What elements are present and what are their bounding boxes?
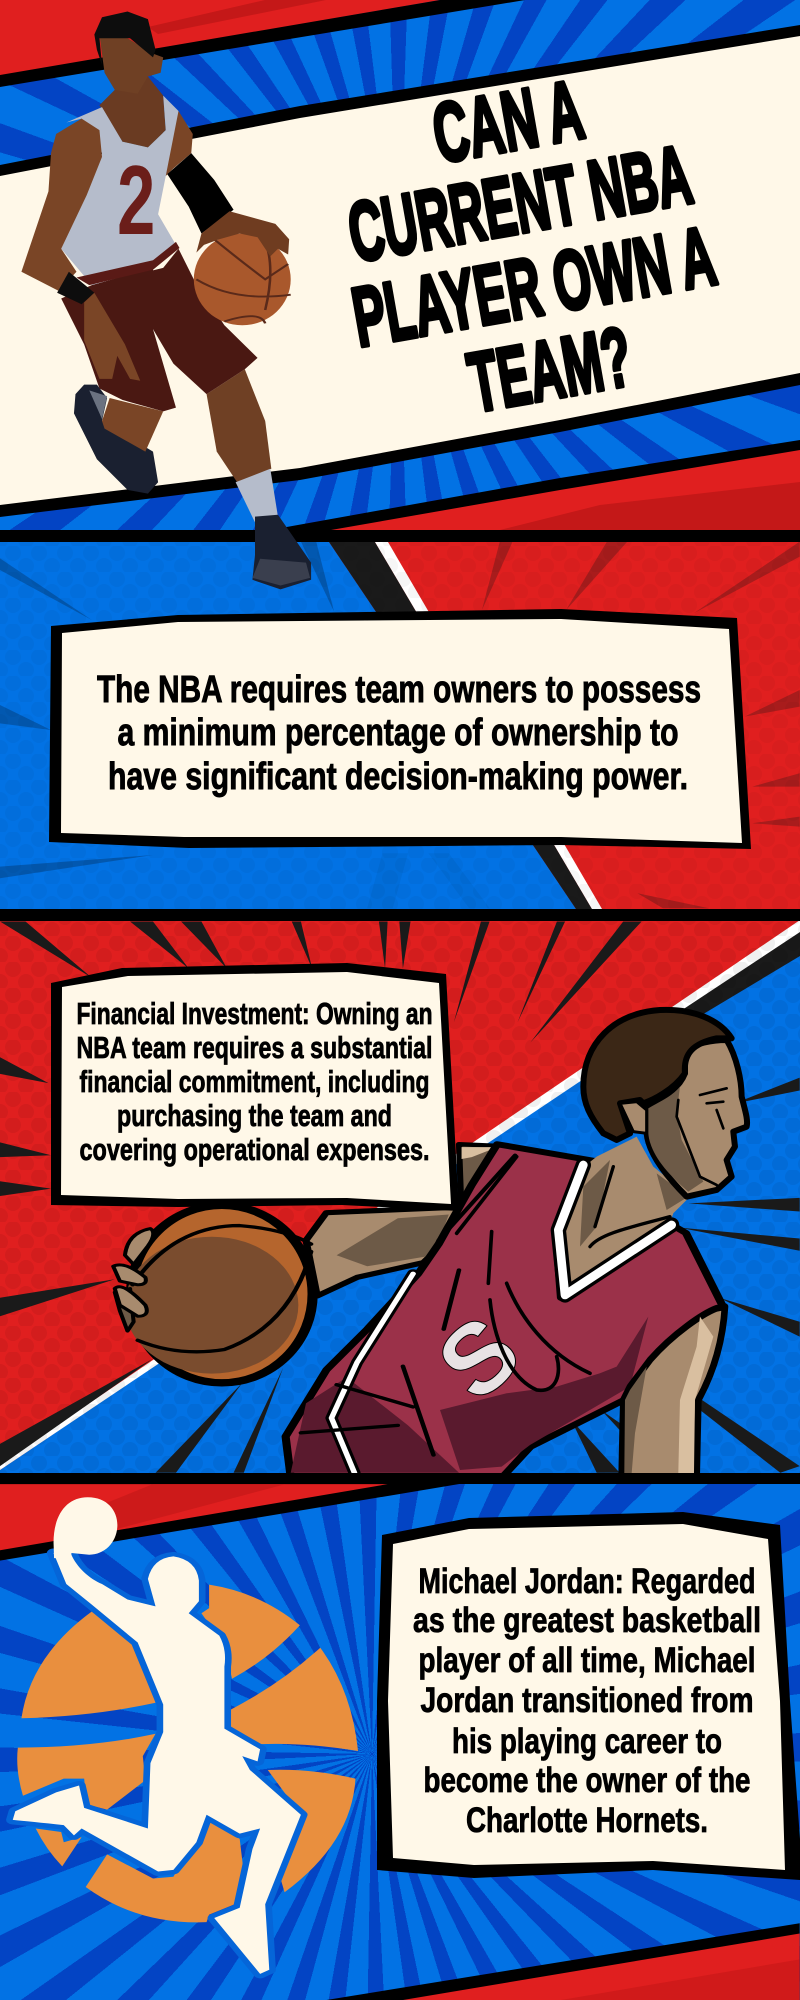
- icon: orange basketball and leaping silhouette: [13, 1497, 358, 1974]
- text block: financial investment: purchasing the team and: [117, 1098, 392, 1133]
- icon: player one shorts: [61, 249, 258, 411]
- icon: player one number: 2: [117, 146, 155, 256]
- icon: player one right leg and shoe: [207, 369, 311, 589]
- section 3: red and blue diagonal background: [0, 920, 800, 1473]
- section 4: lower panel corners: [0, 1481, 800, 2000]
- icon: player two jersey: [286, 1144, 723, 1477]
- icon: orange basketball segments: [17, 1585, 358, 1922]
- icon: player one torso and arm: [21, 77, 193, 381]
- background: bottom blue sunburst: [0, 1484, 800, 2000]
- section 2: blue and red split background: [0, 542, 800, 909]
- icon: basketball: [113, 1205, 313, 1383]
- text block: michael jordan: Charlotte Hornets.: [466, 1801, 708, 1840]
- icon: jumping player silhouette: [13, 1553, 301, 1974]
- icon: player two number: S: [417, 1294, 541, 1422]
- text block: financial investment: NBA team requires a substantial: [76, 1030, 432, 1065]
- text block: financial investment: [76, 996, 432, 1167]
- title: CAN A: [426, 62, 590, 181]
- icon: player one left leg and shoe: [74, 385, 163, 494]
- icon: player two rear arm: [306, 1144, 502, 1296]
- text block: financial investment: covering operational expenses.: [80, 1132, 430, 1167]
- icon: player two neck and collar: [558, 1137, 690, 1295]
- section 1: header banner: [0, 0, 800, 530]
- icon: silhouette ball: [54, 1497, 117, 1558]
- panel: financial investment callout: [51, 963, 459, 1211]
- background: top blue sunburst: [0, 0, 800, 530]
- text block: michael jordan: his playing career to: [452, 1722, 722, 1761]
- text block: financial investment: Financial Investment: Owning an: [76, 996, 432, 1031]
- icon: player one sleeve and ball: [167, 153, 291, 325]
- icon: player one dribbling: [21, 11, 311, 589]
- text block: financial investment: financial commitment, including: [80, 1064, 430, 1099]
- top black stripe: [0, 0, 525, 87]
- cream title band: [0, 25, 800, 517]
- horizontal black section bars: [0, 530, 800, 1484]
- top red corner: [0, 1481, 479, 1561]
- panel: ownership rule callout: [49, 609, 751, 849]
- bottom red corner: [326, 1923, 800, 2000]
- player two dribbling a basketball: [113, 1010, 747, 1477]
- icon: player one head: [94, 11, 163, 94]
- speed lines: [0, 921, 800, 1473]
- text block: michael jordan: [413, 1562, 761, 1840]
- icon: player two right arm: [622, 1307, 725, 1477]
- title: [341, 62, 722, 430]
- text block: ownership rule: [97, 669, 701, 798]
- panel: michael jordan callout: [377, 1512, 800, 1880]
- icon: hand on ball: [113, 1229, 153, 1331]
- lower red corner: [270, 440, 800, 530]
- icon: player two head: [583, 1010, 747, 1197]
- title: TEAM?: [462, 309, 638, 430]
- top red corner: [0, 0, 440, 76]
- icon: player two jersey shadow: [440, 1317, 648, 1470]
